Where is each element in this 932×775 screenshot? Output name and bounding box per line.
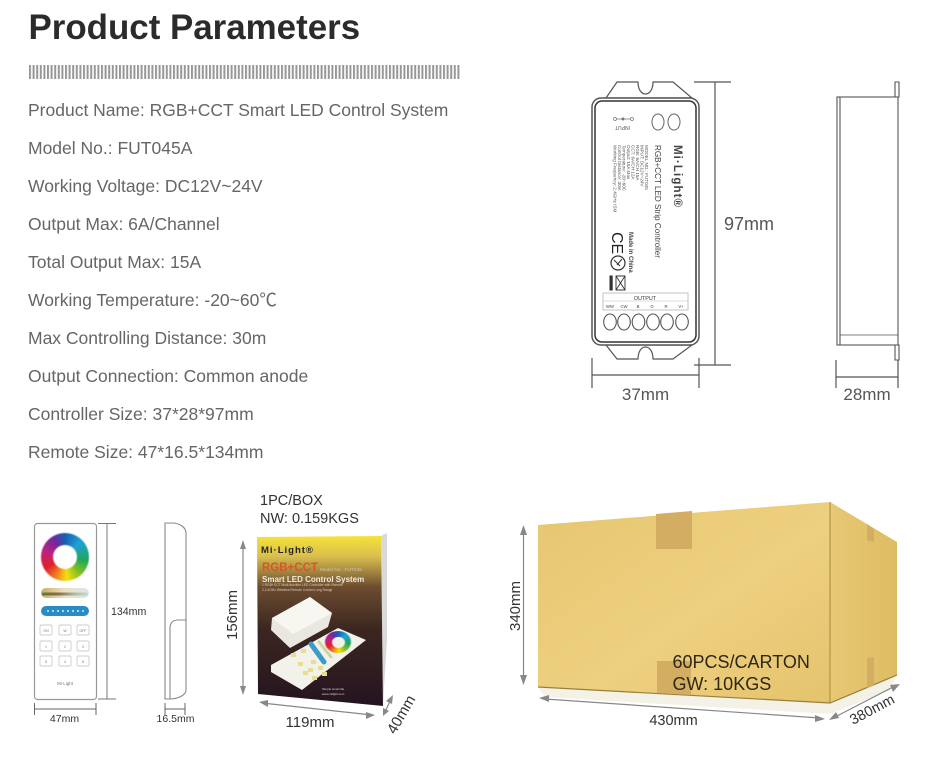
- icon: remote colour wheel: [41, 533, 89, 581]
- spec lines: CCT: 6A/CH 12A: [630, 145, 636, 180]
- dimension: 47mm: 47mm: [50, 713, 79, 725]
- made in china: Made in China: [627, 232, 633, 273]
- spec lines: Temperature: -20~60C: [622, 145, 626, 192]
- parameter list: [28, 100, 448, 462]
- dimension: 134mm: 134mm: [111, 606, 146, 618]
- shipping carton: [538, 502, 897, 703]
- recycle symbol: [611, 256, 625, 270]
- decorative barcode divider: [29, 65, 460, 79]
- dimension: 340mm: 340mm: [507, 581, 524, 631]
- dimension: 37mm: [592, 358, 699, 404]
- button captions: 2: [64, 645, 66, 649]
- terminals: [604, 314, 688, 330]
- dimension: 97mm: [694, 82, 774, 365]
- output label: B: [637, 304, 640, 309]
- dimension: 28mm: [836, 360, 898, 404]
- button captions: S: [82, 660, 85, 664]
- remote front view: [34, 524, 96, 700]
- power connector circles: [652, 114, 680, 130]
- parameter list: Product Name: RGB+CCT Smart LED Control System: [28, 100, 448, 120]
- CE mark: CE: [608, 232, 625, 254]
- parameter list: Working Temperature: -20~60℃: [28, 290, 277, 310]
- controller side view: [837, 82, 899, 360]
- dimension: 119mm: [259, 700, 375, 731]
- packing tape: [656, 511, 874, 695]
- spec lines: RGB: 6A/CH 15A: [635, 145, 640, 181]
- carton side face: [830, 502, 897, 703]
- dimension: 380mm: [829, 684, 900, 729]
- carton front face: [538, 502, 830, 703]
- product name on label: RGB+CCT LED Strip Controller: [653, 145, 662, 258]
- parameter list: Output Max: 6A/Channel: [28, 214, 220, 234]
- dimension: 430mm: [539, 695, 825, 729]
- button captions: W: [63, 629, 67, 633]
- box small print: 1.RGB+CCT Multi-function LED Controller with Remote: [262, 583, 343, 587]
- parameter list: Total Output Max: 15A: [28, 252, 201, 272]
- dimension: 340mm: [507, 525, 527, 685]
- dimension: 16.5mm: [157, 703, 195, 725]
- dimension: 119mm: 119mm: [286, 714, 334, 731]
- button captions: S: [45, 660, 48, 664]
- title: Product Parameters: [28, 8, 360, 47]
- output label: CW: [621, 304, 628, 309]
- dimension: 97mm: 97mm: [724, 214, 774, 234]
- output label: V+: [678, 304, 684, 309]
- bin symbol: [610, 276, 625, 290]
- spec lines: INPUT: DC12V~24V: [640, 145, 644, 187]
- box small print: [262, 583, 343, 592]
- dimension: 134mm: [98, 524, 146, 699]
- spec lines: [612, 145, 649, 212]
- parameter list: Model No.: FUT045A: [28, 138, 193, 158]
- button captions: 3: [82, 645, 84, 649]
- box footer: Simple smart life: [322, 687, 345, 691]
- button captions: [43, 629, 86, 664]
- icon: box remote colour wheel: [325, 631, 351, 653]
- box remote illustration: [271, 628, 366, 690]
- brightness slider: [41, 606, 89, 616]
- dimension: 40mm: 40mm: [384, 692, 419, 737]
- box caption: NW: 0.159KGS: [260, 511, 359, 527]
- dimension: 430mm: 430mm: [649, 713, 698, 729]
- controller body: [606, 82, 692, 98]
- box small print: 2.2.4GHz Wireless Remote Control Long Range: [262, 588, 333, 592]
- parameter list: Output Connection: Common anode: [28, 366, 308, 386]
- box headline: Smart LED Control System: [262, 575, 364, 584]
- parameter list: Controller Size: 37*28*97mm: [28, 404, 254, 424]
- box remote buttons: [291, 649, 327, 680]
- dimension: 156mm: 156mm: [224, 590, 241, 640]
- carton quantity text: 60PCS/CARTON: [672, 652, 810, 672]
- button captions: OFF: [80, 629, 86, 633]
- carton weight text: GW: 10KGS: [672, 674, 771, 694]
- button captions: ON: [43, 629, 49, 633]
- button captions: 4: [64, 660, 66, 664]
- buttons: [40, 625, 89, 666]
- dimension: 16.5mm: 16.5mm: [157, 713, 195, 725]
- remote brand: Mi·Light: [57, 681, 74, 686]
- dimension: 156mm: [224, 540, 246, 695]
- CCT slider: [41, 588, 89, 598]
- remote side view: [165, 523, 186, 699]
- box controller illustration: [271, 597, 332, 648]
- parameter list: Max Controlling Distance: 30m: [28, 328, 266, 348]
- dimension: 380mm: 380mm: [847, 692, 898, 729]
- parameter list: Working Voltage: DC12V~24V: [28, 176, 263, 196]
- spec lines: Working Frequency: 2.4GHz ISM: [612, 145, 618, 212]
- box model number: Model No.: FUT045: [320, 567, 362, 573]
- box footer: [322, 687, 345, 696]
- box RGB+CCT logo: RGB+CCT: [262, 562, 318, 574]
- spec lines: Output: 15A Max: [626, 145, 631, 180]
- dimension: 47mm: [34, 703, 96, 725]
- box brand: Mi·Light®: [261, 545, 314, 556]
- controller front view: [592, 82, 699, 359]
- box remote sliders: [311, 644, 324, 662]
- output label: OUTPUT: [634, 296, 657, 302]
- dimension: 28mm: 28mm: [843, 385, 891, 404]
- box caption: [260, 493, 359, 527]
- button captions: 1: [45, 645, 47, 649]
- spec lines: MODEL NO.: FUT045: [644, 145, 649, 190]
- box footer: www.milight.com: [322, 692, 345, 696]
- output label: [603, 293, 688, 310]
- retail box: [257, 533, 387, 706]
- output label: WW: [606, 304, 614, 309]
- parameter list: Remote Size: 47*16.5*134mm: [28, 442, 263, 462]
- output label: G: [650, 304, 654, 309]
- input symbol: [614, 118, 634, 130]
- spec lines: Control Distance: 30m: [617, 145, 622, 191]
- brand: Mi·Light®: [671, 145, 683, 208]
- carton ground shadow: [538, 675, 897, 714]
- dimension: 37mm: 37mm: [622, 385, 669, 404]
- box caption: 1PC/BOX: [260, 493, 323, 509]
- output label: R: [664, 304, 668, 309]
- input symbol: INPUT: [615, 124, 630, 130]
